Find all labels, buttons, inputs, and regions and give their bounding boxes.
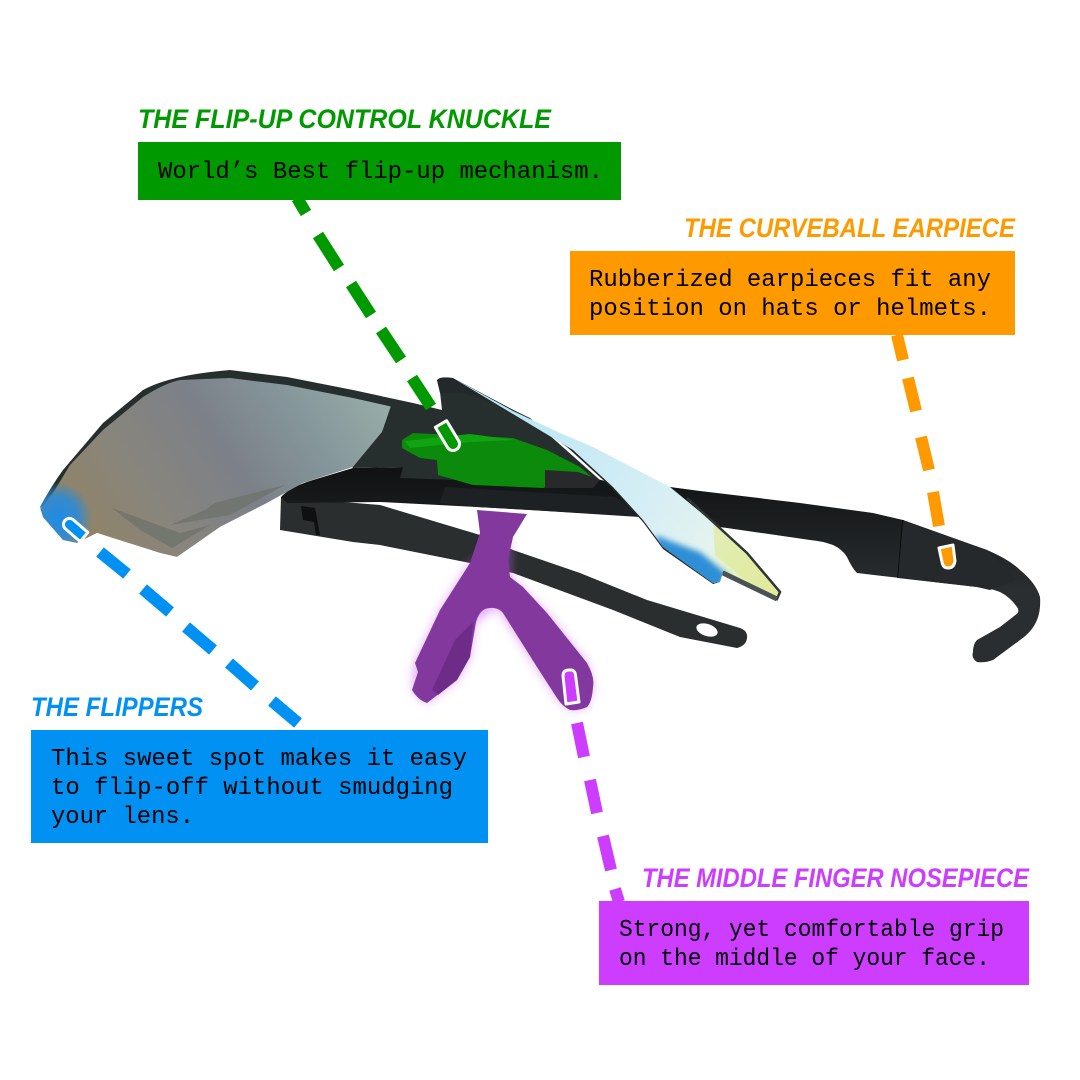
green flip-up knuckle: [402, 433, 593, 488]
body text: [51, 746, 467, 831]
purple middle finger nosepiece: [412, 510, 593, 710]
heading: THE FLIP-UP CONTROL KNUCKLE: [138, 104, 552, 134]
flip-up flipper blue edge: [655, 535, 728, 590]
flip-up lens edge: [687, 498, 780, 599]
glasses illustration: [24, 198, 1040, 902]
box: [138, 142, 621, 200]
heading: THE MIDDLE FINGER NOSEPIECE: [642, 863, 1030, 893]
marker: nosepiece: [563, 670, 579, 704]
body text: your lens.: [51, 804, 194, 831]
callout: middle finger nosepiece: [599, 863, 1030, 985]
callout: flippers: [31, 692, 488, 843]
body text: [589, 267, 991, 323]
flipper blue highlight: [40, 483, 91, 543]
blue leader line: [100, 552, 298, 723]
heading: THE FLIPPERS: [31, 692, 203, 722]
arm hinge detail: [301, 506, 320, 535]
main lens rim: [40, 370, 600, 507]
lens etched logo: [112, 485, 285, 548]
upper frame and curveball earpiece: [281, 457, 1040, 662]
lens tint tip: [713, 524, 767, 588]
body text: World’s Best flip-up mechanism.: [158, 159, 603, 186]
body text: [619, 917, 1004, 973]
body text: position on hats or helmets.: [589, 296, 991, 323]
body text: Strong, yet comfortable grip: [619, 917, 1004, 944]
marker: earpiece: [939, 545, 955, 568]
marker: knuckle: [435, 421, 459, 450]
body text: on the middle of your face.: [619, 946, 990, 973]
earpiece seam and highlights: [898, 520, 903, 578]
flip-up lens: [454, 378, 778, 596]
flip-up lens thick edge: [723, 573, 777, 599]
flip-up lens rim: [437, 377, 720, 584]
knuckle highlight: [405, 434, 515, 448]
box: [31, 730, 488, 843]
marker: flippers: [63, 518, 88, 542]
body text: This sweet spot makes it easy: [51, 746, 467, 773]
callout: flip-up control knuckle: [138, 104, 621, 200]
nose bridge segment: [440, 487, 650, 517]
heading: THE CURVEBALL EARPIECE: [684, 213, 1016, 243]
body text: to flip-off without smudging: [51, 775, 453, 802]
purple leader line: [577, 723, 619, 902]
callout: curveball earpiece: [570, 213, 1016, 335]
nosepiece grip texture: [432, 622, 473, 695]
dark hinge blocks: [545, 470, 600, 488]
box: [570, 251, 1015, 335]
main grey lens: [24, 378, 393, 557]
arm slot: [695, 621, 719, 639]
lower temple arm: [280, 497, 747, 648]
purple glow: [412, 540, 593, 710]
earpiece soft panel: [898, 521, 1016, 590]
body text: Rubberized earpieces fit any: [589, 267, 991, 294]
box: [599, 901, 1029, 985]
green leader line: [297, 198, 431, 407]
orange leader line: [897, 335, 939, 526]
